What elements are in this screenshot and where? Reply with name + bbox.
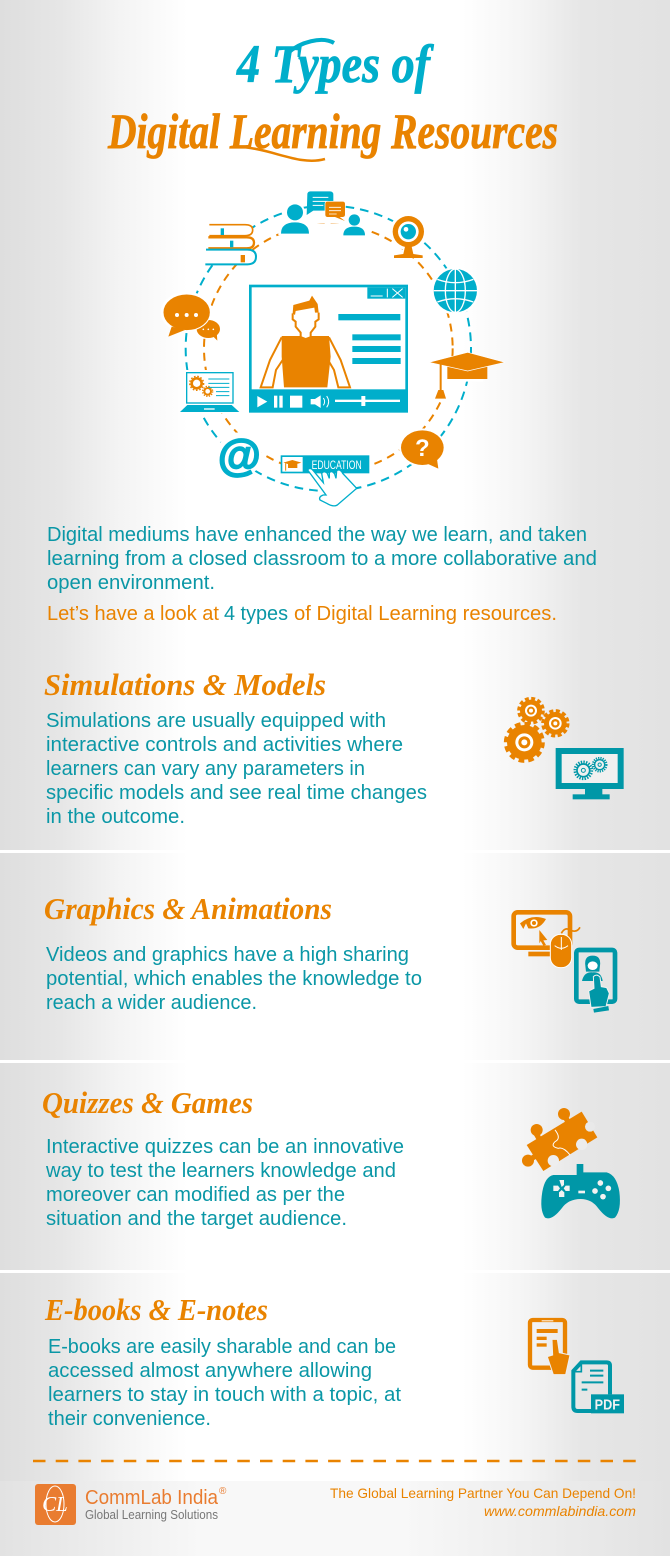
text block: way to test the learners knowledge and [45, 1160, 396, 1182]
icon: tablet and pdf: PDF [595, 1398, 620, 1414]
icon: gears and monitor [506, 699, 621, 799]
logo: Global Learning Solutions [85, 1508, 218, 1522]
text block: Interactive quizzes can be an innovative [46, 1136, 404, 1158]
icon: tablet and pdf [530, 1320, 624, 1414]
panel: graphics and animations [44, 891, 615, 1014]
intro callout: 4 types [224, 603, 288, 625]
logo [35, 1484, 227, 1525]
panel: quizzes and games [42, 1085, 620, 1230]
hero illustration [161, 191, 505, 506]
icon: book stack [205, 225, 256, 264]
text block: moreover can modified as per the [46, 1184, 345, 1206]
title: Digital Learning Resources [107, 103, 558, 159]
presenter [261, 296, 350, 387]
footer [35, 1484, 636, 1525]
intro callout: Let’s have a look at [47, 603, 219, 625]
intro callout: of Digital Learning resources. [294, 603, 557, 625]
intro callout [47, 603, 557, 625]
text block: learners can vary any parameters in [46, 758, 365, 780]
text block: Videos and graphics have a high sharing [46, 944, 409, 966]
heading: Simulations & Models [44, 667, 326, 702]
video player window [249, 286, 408, 412]
tagline: The Global Learning Partner You Can Depend On! [330, 1485, 636, 1501]
intro paragraph [47, 524, 597, 594]
panel: e-books and e-notes [44, 1292, 624, 1430]
text block: their convenience. [48, 1408, 211, 1430]
icon: at sign: @ [218, 431, 261, 480]
text block: E-books are easily sharable and can be [48, 1336, 396, 1358]
icon: education search button: EDUCATION [312, 458, 362, 472]
heading: E-books & E-notes [44, 1292, 268, 1327]
text block: reach a wider audience. [46, 992, 257, 1014]
icon: puzzle and gamepad [522, 1108, 620, 1218]
intro paragraph: learning from a closed classroom to a more collaborative and [47, 548, 597, 570]
text block [45, 1136, 404, 1230]
website: www.commlabindia.com [484, 1503, 636, 1519]
text block: potential, which enables the knowledge to [46, 968, 422, 990]
text block: interactive controls and activities where [46, 734, 403, 756]
icon: laptop [180, 370, 239, 413]
heading: Graphics & Animations [44, 891, 332, 926]
title: 4 Types of [236, 34, 434, 94]
panel: simulations and models [44, 667, 621, 828]
text block: accessed almost anywhere allowing [48, 1360, 372, 1382]
logo: ® [219, 1486, 227, 1497]
icon: speech bubbles [161, 292, 220, 341]
heading: Quizzes & Games [42, 1085, 253, 1120]
icon: education search button [281, 455, 369, 506]
icon: question bubble [399, 428, 446, 469]
text block [46, 710, 427, 828]
icon: monitor, mouse and tablet [514, 912, 615, 1013]
logo: CL [42, 1492, 68, 1516]
icon: webcam [390, 213, 427, 258]
logo: CommLab India [85, 1487, 219, 1509]
text block: in the outcome. [46, 806, 185, 828]
icon: people chatting [278, 191, 367, 237]
intro paragraph: Digital mediums have enhanced the way we learn, and taken [47, 524, 587, 546]
icon: globe [431, 267, 479, 315]
intro paragraph: open environment. [47, 572, 215, 594]
icon: question bubble: ? [415, 435, 430, 462]
text block [46, 944, 422, 1014]
text block: learners to stay in touch with a topic, at [48, 1384, 401, 1406]
text block: specific models and see real time changes [46, 782, 427, 804]
text block [48, 1336, 401, 1430]
text block: Simulations are usually equipped with [46, 710, 386, 732]
text block: situation and the target audience. [46, 1208, 347, 1230]
icon: graduation cap [429, 352, 505, 402]
title [107, 34, 558, 161]
